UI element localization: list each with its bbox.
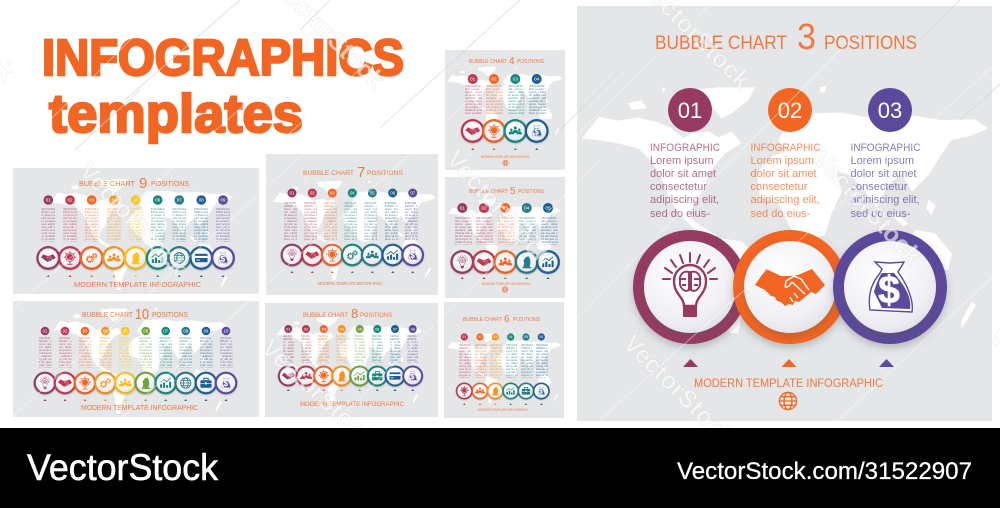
footer label: MODERN TEMPLATE INFOGRAPHIC	[300, 401, 404, 408]
text columns	[455, 217, 558, 245]
heading: POSITIONS	[513, 317, 541, 323]
heading	[79, 175, 189, 192]
heading: 3	[797, 16, 816, 57]
heading: POSITIONS	[824, 33, 917, 54]
number badge 02: 02	[778, 98, 802, 123]
panel: bubble chart 3 positions (large)	[577, 6, 992, 421]
number badges: 04	[509, 335, 513, 339]
heading: POSITIONS	[151, 181, 189, 188]
number badges: 02	[481, 206, 487, 212]
text block 01: consectetur	[650, 181, 707, 193]
text block 03: sed do eius-	[850, 208, 911, 220]
number badges: 05	[123, 328, 128, 334]
text block 02	[750, 142, 821, 220]
text block 01: dolor sit amet	[650, 168, 716, 180]
number badges: 09	[204, 328, 209, 334]
main title: INFOGRAPHICS	[42, 29, 404, 86]
number badges: 01	[462, 335, 466, 339]
number badges: 03	[83, 328, 88, 334]
icon bubbles	[34, 372, 237, 394]
heading	[303, 306, 393, 321]
number badges	[468, 74, 542, 84]
heading: POSITIONS	[518, 189, 545, 195]
bubble: money bag icon	[833, 230, 947, 344]
icon bubbles	[450, 250, 560, 274]
heading	[303, 164, 404, 181]
number badges	[44, 195, 228, 205]
heading: BUBBLE CHART	[469, 59, 507, 65]
text block 03: INFOGRAPHIC	[850, 142, 921, 154]
number badges: 06	[155, 198, 161, 203]
number badges: 02	[478, 335, 482, 339]
heading: BUBBLE CHART	[469, 189, 508, 195]
icon bubbles	[456, 382, 550, 400]
heading: POSITIONS	[367, 170, 404, 177]
number badges: 05	[358, 327, 362, 331]
number badge 03	[868, 88, 912, 132]
number badges: 05	[524, 335, 528, 339]
icon bubbles	[36, 246, 235, 270]
bubble: handshake icon	[733, 230, 847, 344]
heading	[463, 314, 541, 325]
pointer markers	[47, 275, 224, 277]
text columns	[41, 208, 230, 242]
heading	[469, 186, 545, 197]
text block 01: sed do eius-	[650, 208, 710, 220]
number badges: 02	[310, 190, 315, 196]
pointer markers	[471, 148, 538, 150]
number badge 03: 03	[878, 98, 902, 123]
number badges: 02	[304, 327, 308, 331]
number badges	[284, 325, 417, 333]
text block 02: consectetur	[750, 181, 808, 193]
heading	[655, 16, 917, 57]
heading: 5	[510, 186, 516, 197]
number badges: 05	[370, 190, 375, 196]
number badges	[288, 188, 417, 198]
watermarks: VectorStock	[256, 334, 381, 453]
number badges: 03	[513, 77, 518, 83]
panel: bubble chart 9 positions	[13, 168, 259, 294]
footer label: MODERN TEMPLATE INFOGRAPHIC	[481, 155, 530, 159]
number badges: 03	[322, 327, 326, 331]
pointer markers	[290, 271, 414, 273]
brand name: VectorStock	[27, 447, 218, 488]
text block 02: INFOGRAPHIC	[750, 142, 821, 154]
footer label: MODERN TEMPLATE INFOGRAPHIC	[694, 378, 883, 390]
text columns	[465, 85, 546, 115]
watermarks: VectorStock	[441, 145, 558, 271]
footer label: MODERN TEMPLATE INFOGRAPHIC	[482, 282, 531, 286]
number badges: 09	[220, 198, 226, 203]
text block 03: Lorem ipsum	[850, 155, 914, 167]
number badges: 01	[286, 327, 290, 331]
pointer marker 02	[782, 359, 796, 367]
heading: POSITIONS	[360, 312, 393, 319]
text block 01	[650, 142, 720, 220]
number badges: 07	[410, 190, 416, 196]
text columns	[283, 335, 418, 363]
number badges: 02	[63, 328, 68, 334]
text block 02: sed do eius-	[750, 208, 811, 220]
number badges: 10	[224, 328, 229, 334]
footer label: MODERN TEMPLATE INFOGRAPHIC	[318, 281, 384, 286]
number badges: 06	[143, 328, 149, 334]
heading: POSITIONS	[517, 59, 545, 65]
footer label: MODERN TEMPLATE INFOGRAPHIC	[478, 408, 528, 412]
heading	[469, 56, 545, 67]
watermarks: VectorStock	[618, 329, 740, 451]
number badges: 01	[470, 77, 476, 83]
number badges: 04	[524, 206, 530, 212]
text block 03: dolor sit amet	[850, 168, 917, 180]
number badges: 07	[163, 328, 169, 334]
number badge 01	[668, 88, 712, 132]
text block 03: adipiscing elit,	[850, 194, 920, 206]
heading: BUBBLE CHART	[655, 33, 787, 54]
pointer markers	[463, 403, 543, 405]
number badges	[461, 333, 545, 341]
number badges: 03	[330, 190, 335, 196]
text block 03: consectetur	[850, 181, 908, 193]
image URL: VectorStock.com/31522907	[677, 458, 972, 485]
number badge 02	[768, 88, 812, 132]
footer label: MODERN TEMPLATE INFOGRAPHIC	[81, 403, 199, 412]
pointer markers	[461, 277, 550, 279]
text block 01: adipiscing elit,	[650, 194, 719, 206]
text columns	[284, 202, 418, 240]
number badges	[41, 327, 230, 335]
panel: bubble chart 8 positions	[265, 303, 438, 417]
text block 02: Lorem ipsum	[750, 155, 814, 167]
watermarks: VectorStock	[808, 145, 927, 270]
heading: BUBBLE CHART	[79, 181, 136, 188]
heading: BUBBLE CHART	[463, 317, 502, 323]
bubble: brain bulb icon	[633, 230, 747, 344]
number badges: 05	[545, 206, 551, 212]
panel: bubble chart 10 positions	[13, 301, 259, 417]
icon bubbles	[278, 366, 423, 386]
text columns	[38, 337, 232, 368]
number badges: 02	[491, 77, 497, 83]
main title	[42, 29, 404, 144]
panel: bubble chart 5 positions	[445, 177, 565, 298]
number badges	[457, 203, 553, 213]
subtitle: templates	[49, 84, 303, 144]
heading: BUBBLE CHART	[303, 170, 354, 177]
text block 01: INFOGRAPHIC	[650, 142, 720, 154]
number badges: 01	[46, 198, 51, 203]
number badges: 03	[89, 198, 95, 203]
pointer markers	[44, 399, 228, 401]
icon: globe	[779, 392, 797, 410]
panel: bubble chart 7 positions	[266, 154, 438, 295]
text columns	[459, 344, 548, 378]
number badges: 01	[43, 328, 48, 334]
number badges: 03	[503, 206, 508, 212]
text block 02: dolor sit amet	[750, 168, 817, 180]
text block 03	[850, 142, 921, 220]
number badges: 05	[133, 198, 139, 203]
number badges: 04	[534, 77, 540, 83]
number badges: 06	[390, 190, 396, 196]
pointer markers	[287, 389, 414, 391]
icon bubbles	[281, 244, 424, 266]
number badges: 08	[411, 327, 415, 331]
heading: 4	[509, 56, 515, 67]
panel: bubble chart 4 positions	[445, 50, 565, 170]
world map	[582, 86, 988, 333]
text block 02: adipiscing elit,	[750, 194, 820, 206]
number badges: 04	[340, 327, 344, 331]
number badge 01: 01	[678, 98, 702, 123]
heading: BUBBLE CHART	[303, 312, 348, 319]
number badges: 01	[290, 190, 295, 196]
footer label: MODERN TEMPLATE INFOGRAPHIC	[74, 280, 202, 289]
number badges: 04	[350, 190, 355, 196]
heading: 10	[135, 306, 149, 323]
number badges: 01	[460, 206, 465, 212]
heading: BUBBLE CHART	[82, 312, 134, 319]
pointer marker 01	[683, 359, 698, 367]
number badges: 08	[183, 328, 189, 334]
pointer marker 03	[879, 359, 894, 367]
heading: 7	[357, 164, 365, 181]
number badges: 04	[111, 198, 117, 203]
panel: bubble chart 6 positions	[444, 302, 564, 418]
number badges: 08	[199, 198, 204, 203]
heading: 8	[351, 306, 358, 321]
footer bar	[0, 428, 1000, 508]
number badges: 04	[103, 328, 108, 334]
heading	[82, 306, 188, 323]
heading: POSITIONS	[152, 312, 188, 319]
heading: 9	[139, 175, 147, 192]
icon bubbles	[461, 119, 549, 143]
icon: globe	[502, 287, 508, 292]
number badges: 07	[393, 327, 397, 331]
number badges: 02	[67, 198, 73, 203]
number badges: 07	[177, 198, 182, 203]
number badges: 06	[375, 327, 379, 331]
number badges: 06	[539, 335, 543, 339]
text block 01: Lorem ipsum	[650, 155, 714, 167]
heading: 6	[504, 314, 510, 325]
icon: globe	[503, 160, 508, 166]
watermarks: VectorStock	[74, 157, 193, 282]
number badges: 03	[493, 335, 497, 339]
